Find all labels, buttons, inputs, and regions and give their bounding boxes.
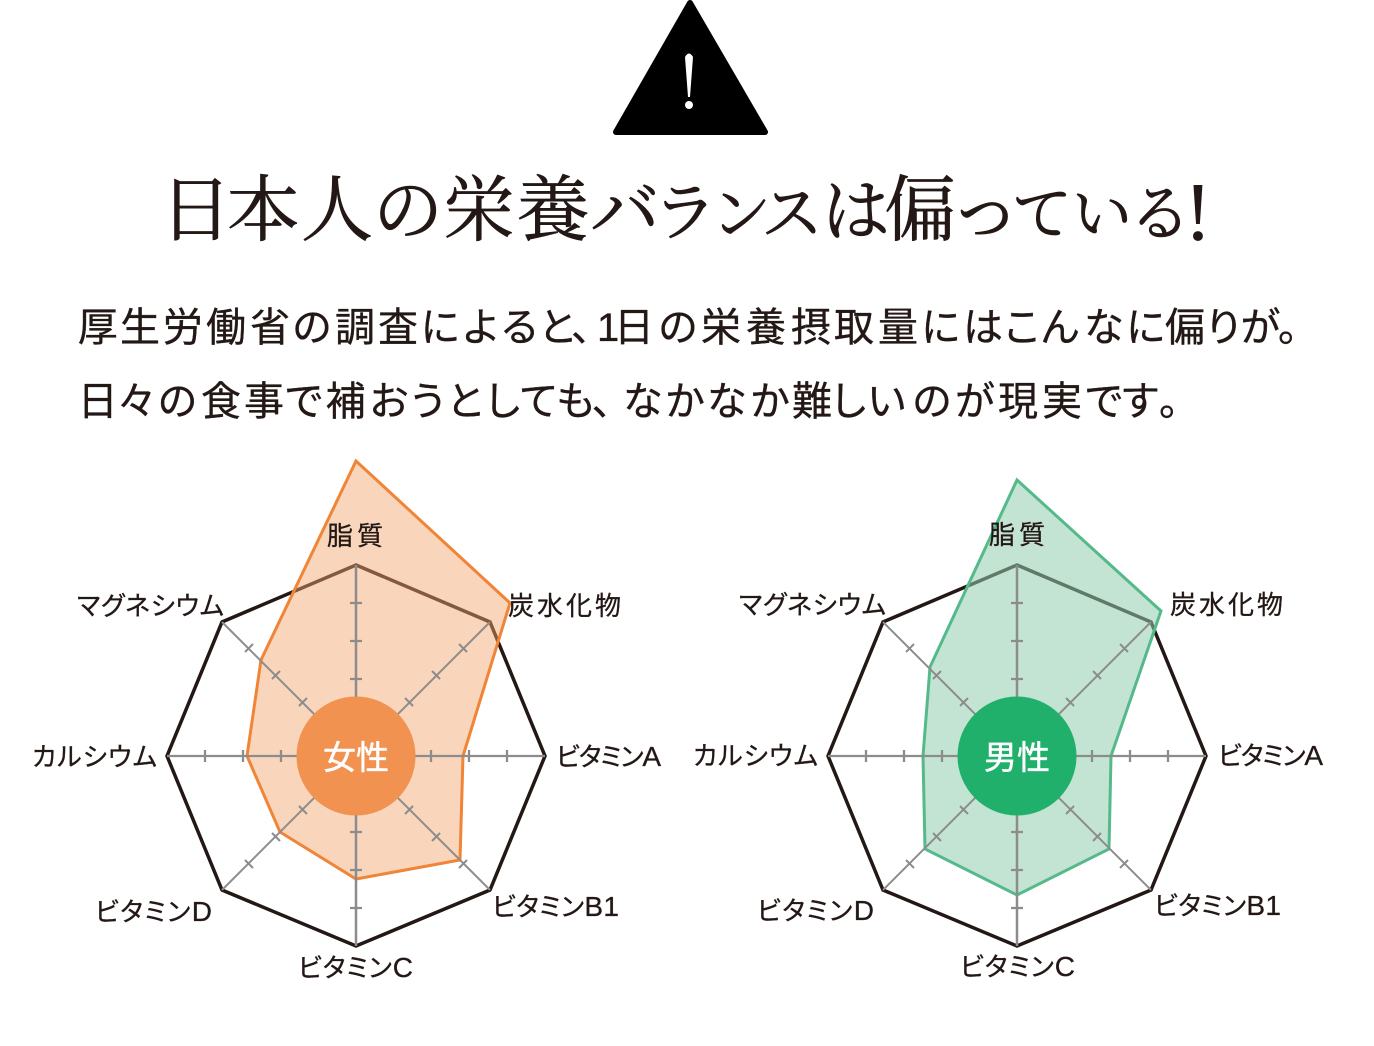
centre badge: male xyxy=(958,696,1076,816)
title: ス xyxy=(761,181,823,249)
text block: description xyxy=(78,306,1318,424)
icon: warning triangle xyxy=(616,3,765,132)
centre badge: female: 女性 xyxy=(323,739,389,776)
title: っ xyxy=(949,171,1021,251)
axis labels: female: ビタミンC xyxy=(298,952,413,983)
text block: description: 日々の食事で補おうとしても、なかなか難しいのが現実です。 xyxy=(78,380,1199,424)
title: の xyxy=(373,174,443,251)
title: 日本人 xyxy=(160,171,373,251)
title: て xyxy=(1012,182,1072,248)
data area: female xyxy=(247,461,510,879)
axis labels: male: マグネシウム xyxy=(739,590,886,620)
chart frame xyxy=(828,565,1206,946)
title: る xyxy=(1129,181,1191,249)
data area: male xyxy=(923,480,1161,895)
axis labels: male: カルシウム xyxy=(693,741,818,771)
axis labels: female: マグネシウム xyxy=(77,591,224,621)
title: 栄養 xyxy=(443,171,589,251)
axis labels: male: ビタミンB1 xyxy=(1154,890,1281,921)
title: ! xyxy=(1184,166,1212,259)
axis labels: female: ビタミンD xyxy=(95,896,212,927)
axis labels: male: 脂質 xyxy=(989,520,1045,550)
axis labels: female: ビタミンB1 xyxy=(492,891,619,922)
title: バ xyxy=(590,174,660,251)
radar chart: female xyxy=(32,461,661,983)
axis labels: female: 炭水化物 xyxy=(508,591,621,621)
title: ラ xyxy=(653,178,717,249)
radar chart: male xyxy=(693,480,1323,982)
centre badge: female xyxy=(296,696,416,816)
axis labels: female: カルシウム xyxy=(32,742,157,772)
axis labels: male: ビタミンA xyxy=(1218,740,1323,771)
title: 偏 xyxy=(884,171,956,251)
axis labels: male: ビタミンD xyxy=(757,895,874,926)
axis labels: female xyxy=(32,521,661,983)
axis labels: male: 炭水化物 xyxy=(1170,590,1283,620)
text block: description: 厚生労働省の調査によると、1日の栄養摂取量にはこんなに偏りが。 xyxy=(78,306,1318,350)
centre badge: male: 男性 xyxy=(984,739,1050,776)
chart frame xyxy=(167,565,545,946)
title: い xyxy=(1072,182,1132,248)
title: は xyxy=(822,174,890,250)
axes and ticks xyxy=(828,565,1206,946)
title: ン xyxy=(711,182,771,248)
axis labels: female: 脂質 xyxy=(327,521,383,551)
axis labels: male xyxy=(693,520,1323,982)
axis labels: male: ビタミンC xyxy=(960,951,1075,982)
axis labels: female: ビタミンA xyxy=(556,741,661,772)
axes and ticks xyxy=(167,565,545,946)
